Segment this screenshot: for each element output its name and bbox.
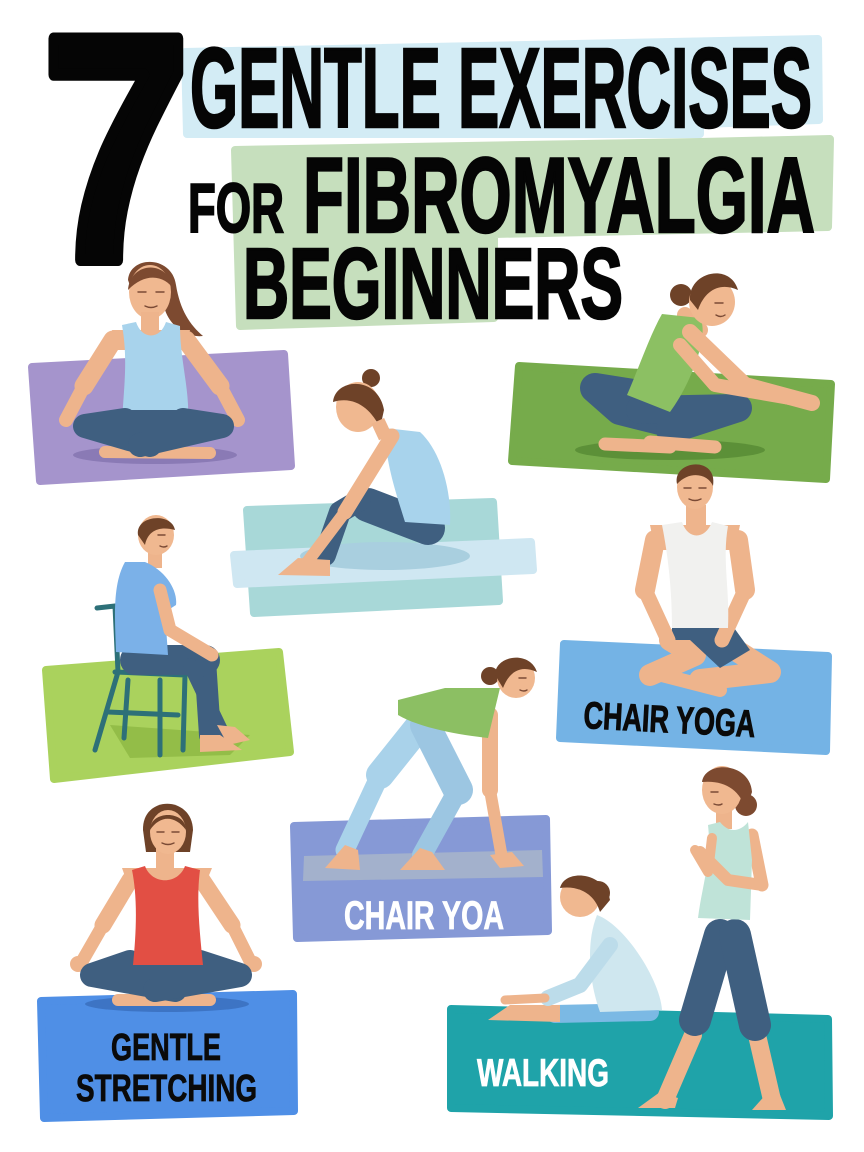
label: gentle stretching: GENTLE [111,1027,221,1069]
icon: chair [95,606,185,755]
label: gentle stretching: STRETCHING [76,1068,257,1110]
label: gentle stretching [76,1027,257,1110]
label: chair yoga: CHAIR YOGA [583,695,756,746]
label: chair yoa: CHAIR YOA [344,894,504,938]
seated figure [488,876,662,1022]
panel: seated stretch and walking, teal mat [451,766,829,1116]
title line 3: BEGINNERS [243,228,623,340]
walking figure [638,766,786,1110]
title [42,0,830,340]
panel: seated forward fold, pale mats [234,369,533,613]
panel: seated man, blue mat [560,464,828,751]
panel: seated side reach, green mat [512,273,831,479]
panel: seated meditation, purple mat [32,262,291,481]
panel: forward bend, periwinkle mat [294,658,548,938]
panel: lotus meditation, blue mat [41,804,294,1118]
label: walking: WALKING [477,1052,609,1095]
panel: chair yoga, lime mat [46,515,290,779]
title line 2 prefix: FOR [188,169,284,247]
